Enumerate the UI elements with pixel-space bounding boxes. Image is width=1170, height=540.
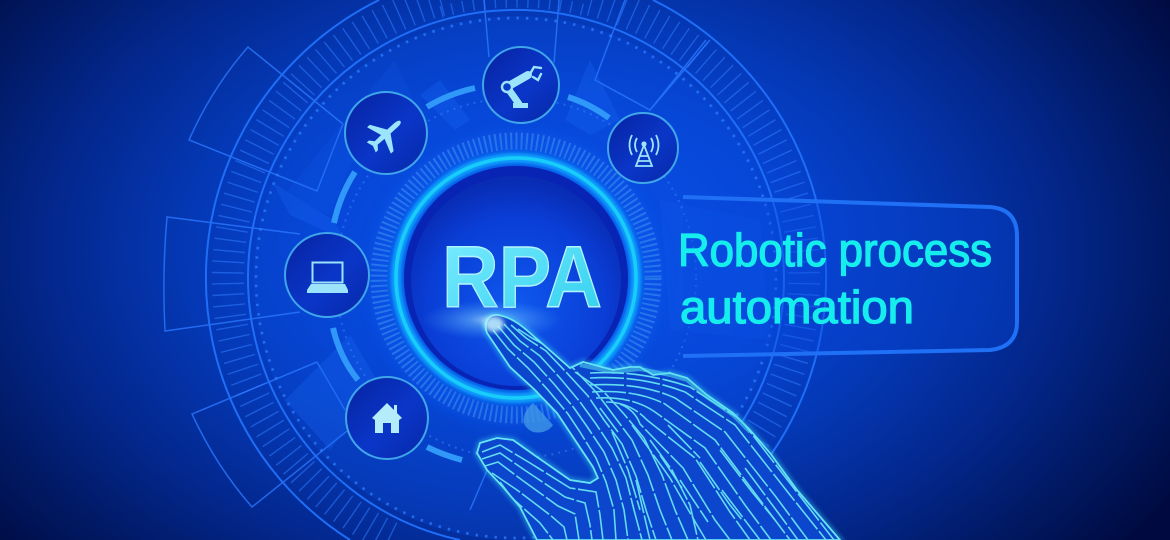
outer technology dial [164, 0, 826, 540]
callout frame [683, 197, 1017, 356]
thumb lines [482, 445, 603, 540]
middle finger behind [524, 403, 553, 433]
dial inner tint [254, 16, 778, 540]
lighter sector wedges [273, 60, 770, 450]
hand glow [477, 315, 840, 540]
icon: airplane [345, 92, 427, 174]
central RPA button [368, 130, 664, 426]
button glow and tick ring [368, 130, 664, 426]
icon: laptop [285, 233, 369, 317]
hand with circuit pattern [477, 315, 840, 540]
RPA label: RPA [442, 229, 602, 326]
middle dashed ring [336, 98, 696, 458]
knuckle highlight [580, 365, 750, 432]
callout text line 2: automation [680, 281, 914, 333]
outer rings [206, 0, 826, 540]
dark inner rim [404, 166, 628, 390]
button disc [411, 176, 621, 386]
fingertip glow [484, 316, 504, 332]
icon: robot arm [483, 47, 559, 123]
index finger lines [493, 330, 616, 540]
hand body [477, 315, 840, 540]
callout text line 1: Robotic process [678, 224, 992, 276]
cyan ring [396, 158, 636, 398]
bright arc segments [333, 88, 609, 460]
icon: antenna tower [608, 113, 678, 183]
callout: Robotic process automation [678, 197, 1017, 356]
knuckle and back-of-hand lines [590, 373, 834, 540]
touch flash [422, 300, 562, 340]
circuit lines [482, 324, 834, 540]
outer segment panels [164, 0, 710, 540]
icon: house [346, 377, 428, 459]
